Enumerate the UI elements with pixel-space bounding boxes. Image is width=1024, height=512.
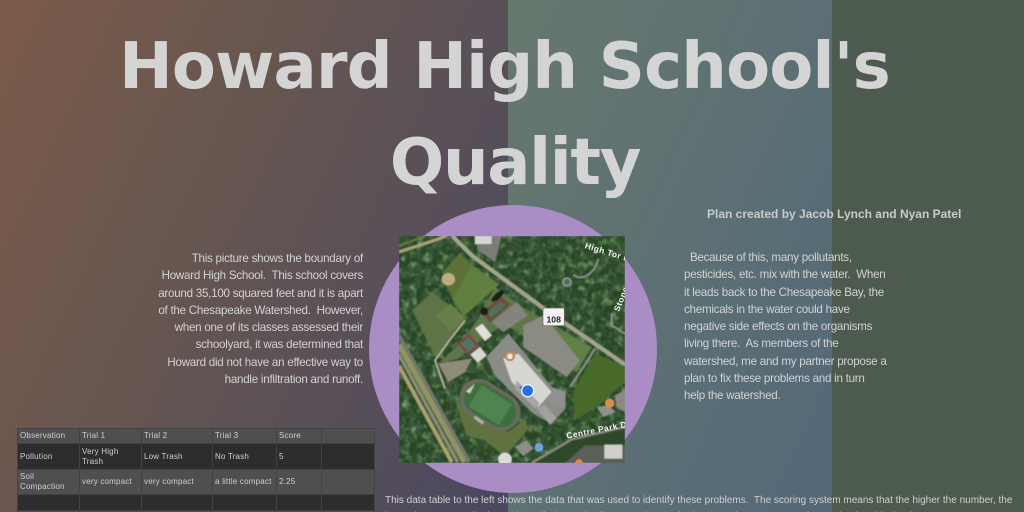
right paragraph: help the watershed. [684, 389, 780, 402]
dark trees [490, 288, 506, 304]
data table: No Trash [215, 452, 249, 460]
data table: Low Trash [144, 452, 183, 460]
right paragraph: negative side effects on the organisms [684, 320, 872, 333]
bottom paragraph: This data table to the left shows the data that was used to identify these problems. The scoring system means that the higher the number, the [385, 495, 1012, 506]
background: right green panel [832, 0, 1024, 512]
title: Quality [390, 126, 640, 200]
stadium [453, 372, 527, 438]
left paragraph: Howard did not have an effective way to [167, 356, 363, 369]
parking lots [523, 315, 580, 377]
sports fields [412, 293, 466, 360]
northeast street [573, 259, 598, 277]
main road [399, 236, 447, 252]
right paragraph: living there. As members of the [684, 337, 838, 350]
purple circle [369, 205, 657, 493]
right paragraph: pesticides, etc. mix with the water. When [684, 268, 886, 281]
left paragraph: around 35,100 squared feet and it is apart [158, 287, 363, 300]
data table: Trial 3 [215, 431, 238, 440]
right paragraph: plan to fix these problems and in turn [684, 372, 865, 385]
data table: Pollution [20, 452, 52, 460]
right paragraph: chemicals in the water could have [684, 303, 850, 316]
data table: 5 [279, 452, 284, 460]
left paragraph: schoolyard, it was determined that [196, 338, 363, 351]
title [119, 30, 890, 200]
left paragraph: Howard High School. This school covers [162, 269, 363, 282]
data table: Trial 2 [144, 431, 167, 440]
grass around school and lot [438, 287, 592, 372]
data table: Soil Compaction [20, 472, 65, 491]
data table: very compact [82, 477, 132, 486]
title: Howard High School's [119, 30, 890, 104]
data table: Very High Trash [82, 446, 118, 466]
data table: a little compact [215, 477, 272, 486]
southeast area [535, 425, 625, 463]
left paragraph: of the Chesapeake Watershed. However, [158, 304, 363, 317]
left paragraph [158, 252, 364, 386]
background: middle teal-blue panel [508, 0, 832, 512]
forest base [399, 236, 625, 463]
data table [17, 428, 375, 512]
road labels [565, 240, 640, 441]
route 108 sign [543, 308, 564, 326]
data table: Observation [20, 431, 65, 440]
map pins [505, 351, 614, 466]
school [487, 334, 565, 424]
tennis courts [481, 297, 510, 323]
left paragraph: This picture shows the boundary of [192, 252, 363, 265]
right paragraph [684, 251, 887, 402]
left paragraph: handle infiltration and runoff. [225, 373, 363, 386]
left paragraph: when one of its classes assessed their [175, 321, 363, 334]
bottom paragraph [385, 495, 1012, 512]
right paragraph: it leads back to the Chesapeake Bay, the [684, 286, 884, 299]
credit line: Plan created by Jacob Lynch and Nyan Patel [707, 207, 961, 221]
satellite map [399, 236, 625, 463]
route 108 sign: 108 [546, 315, 561, 325]
right paragraph: watershed, me and my partner propose a [684, 355, 887, 368]
background: left brown-purple panel [0, 0, 508, 512]
data table: Trial 1 [82, 431, 105, 440]
data table: Score [279, 431, 301, 440]
right paragraph: Because of this, many pollutants, [690, 251, 852, 264]
highway [399, 336, 469, 462]
data table: very compact [144, 477, 194, 486]
path and small roofs [435, 320, 465, 389]
data table: 2.25 [279, 477, 295, 486]
